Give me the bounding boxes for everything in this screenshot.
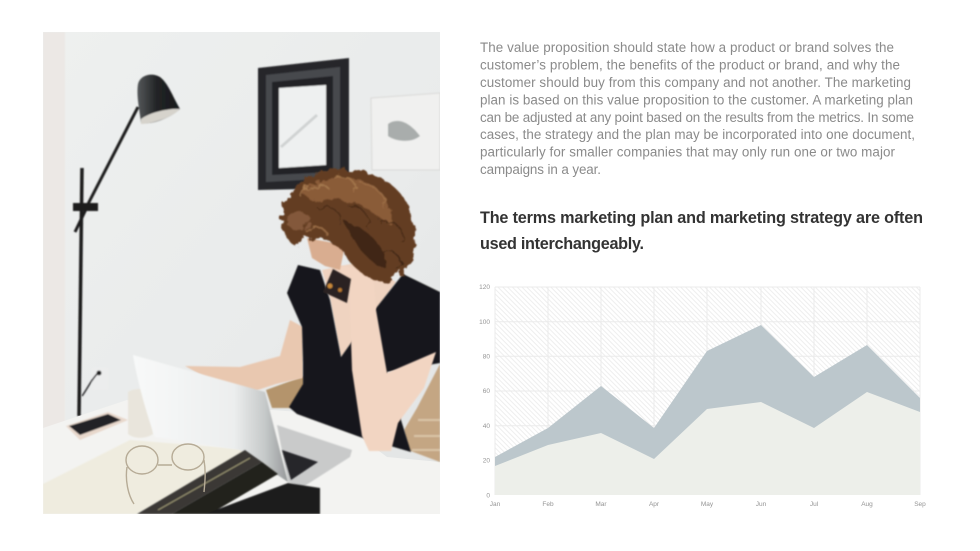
x axis labels: Jan [490,501,501,508]
lower series area [495,392,920,495]
body paragraph [480,40,915,177]
y axis labels: 40 [483,423,490,430]
y axis labels: 80 [483,354,490,360]
body paragraph: plan is based on this value proposition to the customer. A marketing plan [480,92,913,108]
y axis labels [479,284,490,500]
phone held to ear [323,269,351,303]
small white picture frame [371,93,440,170]
laptop keyboard [282,450,318,480]
heading: The terms marketing plan and marketing strategy are often [480,209,923,227]
wall [43,32,440,462]
face [307,238,345,270]
black top [287,265,440,452]
body paragraph: customer’s problem, the benefits of the product or brand, and why the [480,58,900,72]
x axis labels: Mar [595,501,607,508]
laptop lid [133,355,288,482]
upper series area [495,325,920,495]
x axis labels: Jul [810,501,819,508]
eyeglasses [126,444,205,504]
body paragraph: campaigns in a year. [480,162,601,177]
wall socket and cable [81,370,102,398]
y axis labels: 60 [483,388,490,395]
black notebooks [137,450,320,514]
heading: used interchangeably. [480,235,644,253]
x axis labels: Jun [756,501,767,508]
brick column [44,32,64,314]
hatched plot background [495,287,920,495]
body paragraph: The value proposition should state how a product or brand solves the [480,40,894,55]
black picture frame [258,58,349,190]
area chart [479,284,926,508]
body paragraph: particularly for smaller companies that may only run one or two major [480,144,896,160]
x axis labels: Apr [649,501,660,508]
body paragraph: customer should buy from this company and not another. The marketing [480,75,911,90]
heading [480,209,923,253]
y axis labels: 0 [486,492,490,500]
y axis labels: 100 [479,319,490,326]
x axis labels: Aug [861,501,873,508]
smartphone on desk [66,412,128,440]
y axis labels: 120 [479,284,490,291]
left arm [185,320,303,396]
curly hair [282,169,415,282]
woven chair [266,364,440,462]
body paragraph: can be adjusted at any point based on the results from the metrics. In some [480,110,914,125]
floor lamp [73,75,180,416]
cup [128,389,153,438]
laptop base [277,425,352,487]
x axis labels [490,501,926,508]
chest [322,262,396,358]
slide [43,32,926,514]
desk [43,400,440,514]
raised forearm and hand [350,306,437,452]
body paragraph: cases, the strategy and the plan may be incorporated into one document, [480,127,915,142]
photo: woman on the phone at a desk [43,32,440,514]
x axis labels: Feb [542,501,554,508]
cream desk mat [43,440,255,514]
y axis labels: 20 [483,458,490,464]
x axis labels: May [701,501,714,508]
x axis labels: Sep [914,501,926,508]
